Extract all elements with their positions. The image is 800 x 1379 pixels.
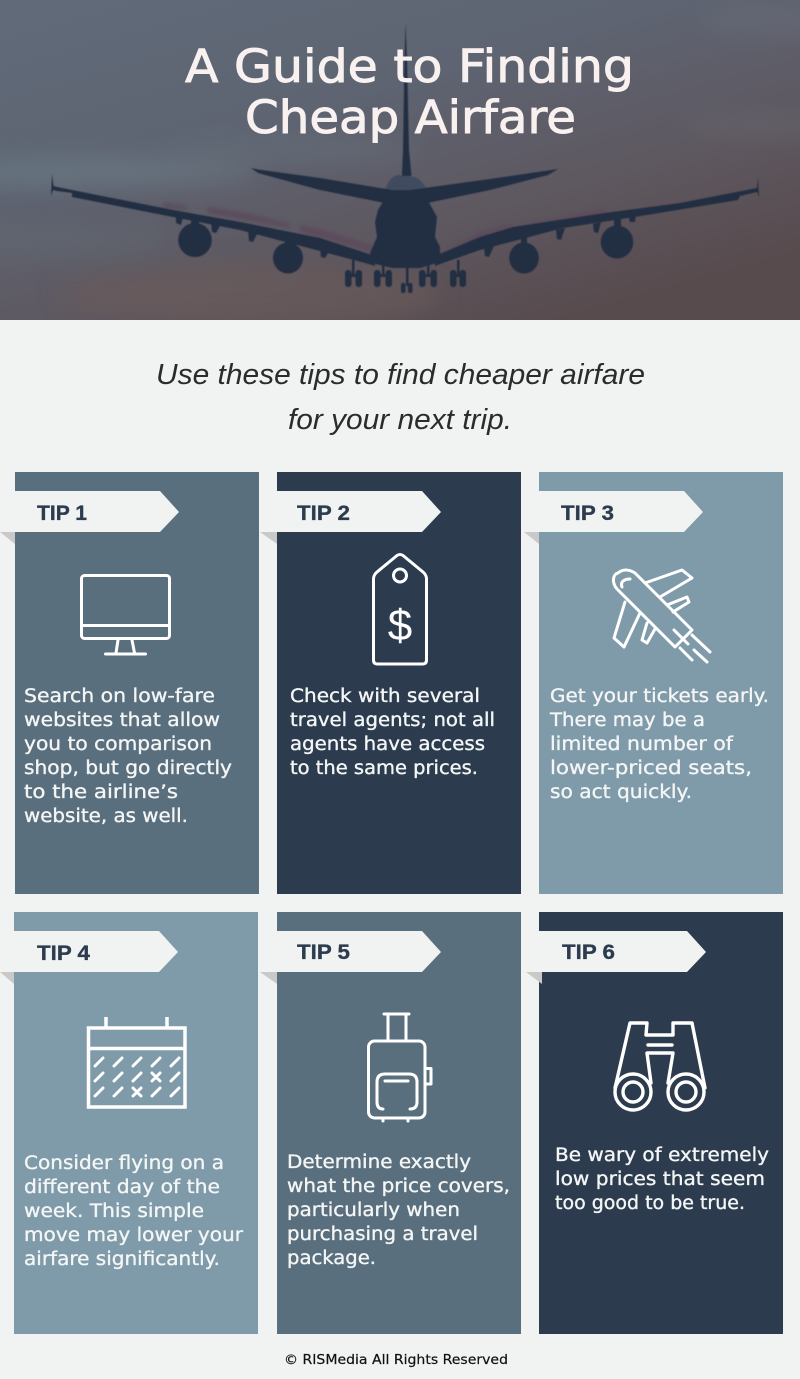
text: tip 5: Determine exactly (287, 1152, 471, 1173)
right wing (435, 177, 759, 266)
text: tip 4: different day of the (24, 1177, 220, 1198)
footer: © RISMedia All Rights Reserved (284, 1353, 508, 1368)
text: tip 1: website, as well. (24, 806, 188, 827)
text: tip 1 (24, 686, 232, 827)
plane silhouette (51, 23, 759, 293)
ribbon: tip 2 (259, 491, 441, 544)
text: tip 4 (24, 1153, 243, 1270)
text: tip 3: lower-priced seats, (550, 758, 752, 779)
subtitle: for your next trip. (288, 404, 512, 436)
panel: tip 6 (523, 912, 783, 1334)
icon: price tag (374, 554, 426, 664)
title: A Guide to Finding (185, 40, 634, 93)
icon: desktop monitor (82, 576, 170, 654)
text: tip 4: Consider flying on a (24, 1153, 224, 1174)
text: tip 2: Check with several (290, 686, 480, 707)
text: tip 1: websites that allow (24, 710, 220, 731)
ribbon: tip 4: TIP 4 (37, 941, 90, 965)
text: tip 6 (555, 1145, 769, 1214)
text: tip 5: particularly when (287, 1200, 460, 1221)
ribbon: tip 6: TIP 6 (562, 940, 615, 964)
ribbon: tip 1 (0, 491, 179, 544)
wing flaps (163, 203, 602, 250)
text: tip 5 (287, 1152, 510, 1269)
text: tip 4: airfare significantly. (24, 1249, 220, 1270)
panel: tip 5 (259, 912, 521, 1334)
ribbon: tip 3: TIP 3 (561, 501, 614, 525)
ribbon: tip 6 (523, 931, 706, 984)
tail fin (402, 23, 412, 176)
title: Cheap Airfare (245, 91, 576, 144)
ribbon: tip 5: TIP 5 (297, 940, 350, 964)
panel: tip 4 (0, 912, 258, 1334)
stabilisers (251, 168, 558, 203)
text: tip 6: low prices that seem (555, 1169, 765, 1190)
text: tip 2 (290, 686, 495, 779)
icon: binoculars (615, 1023, 705, 1110)
text: tip 1: Search on low-fare (24, 686, 215, 707)
text: tip 2: to the same prices. (290, 758, 478, 779)
pylons (176, 212, 636, 258)
subtitle (156, 359, 645, 436)
landing gear (352, 260, 354, 274)
text: tip 4: week. This simple (24, 1201, 204, 1222)
ribbon: tip 2: TIP 2 (297, 501, 350, 525)
icon: airplane (613, 570, 710, 662)
text: tip 6: too good to be true. (555, 1193, 745, 1214)
icon: calendar (88, 1017, 185, 1107)
title (185, 40, 634, 144)
text: tip 5: package. (287, 1248, 376, 1269)
text: tip 3: so act quickly. (550, 782, 692, 803)
icon: price tag: $ (388, 601, 412, 650)
text: tip 4: move may lower your (24, 1225, 243, 1246)
text: tip 1: you to comparison (24, 734, 212, 755)
text: tip 1: shop, but go directly (24, 758, 232, 779)
text: tip 2: agents have access (290, 734, 485, 755)
text: tip 3: limited number of (550, 734, 734, 755)
hero photo: plane at dusk (0, 0, 800, 325)
left wing (51, 174, 375, 266)
text: tip 2: travel agents; not all (290, 710, 495, 731)
text: tip 3: Get your tickets early. (550, 686, 769, 707)
ribbon: tip 1: TIP 1 (37, 501, 87, 525)
panel: tip 2 (259, 472, 521, 894)
engines (178, 223, 212, 257)
panel: tip 3 (523, 472, 783, 894)
text: tip 3 (549, 686, 769, 803)
text: tip 3: There may be a (549, 710, 705, 731)
text: tip 1: to the airline’s (24, 782, 178, 803)
fuselage (370, 195, 440, 268)
ribbon: tip 3 (523, 491, 703, 544)
text: tip 5: purchasing a travel (287, 1224, 478, 1245)
ribbon: tip 5 (259, 931, 441, 984)
subtitle: Use these tips to find cheaper airfare (156, 359, 645, 391)
text: tip 5: what the price covers, (287, 1176, 510, 1197)
text: tip 6: Be wary of extremely (555, 1145, 769, 1166)
rear fuselage dome (386, 174, 426, 190)
panel: tip 1 (0, 472, 259, 894)
icon: suitcase (368, 1014, 431, 1121)
ribbon: tip 4 (0, 931, 178, 984)
